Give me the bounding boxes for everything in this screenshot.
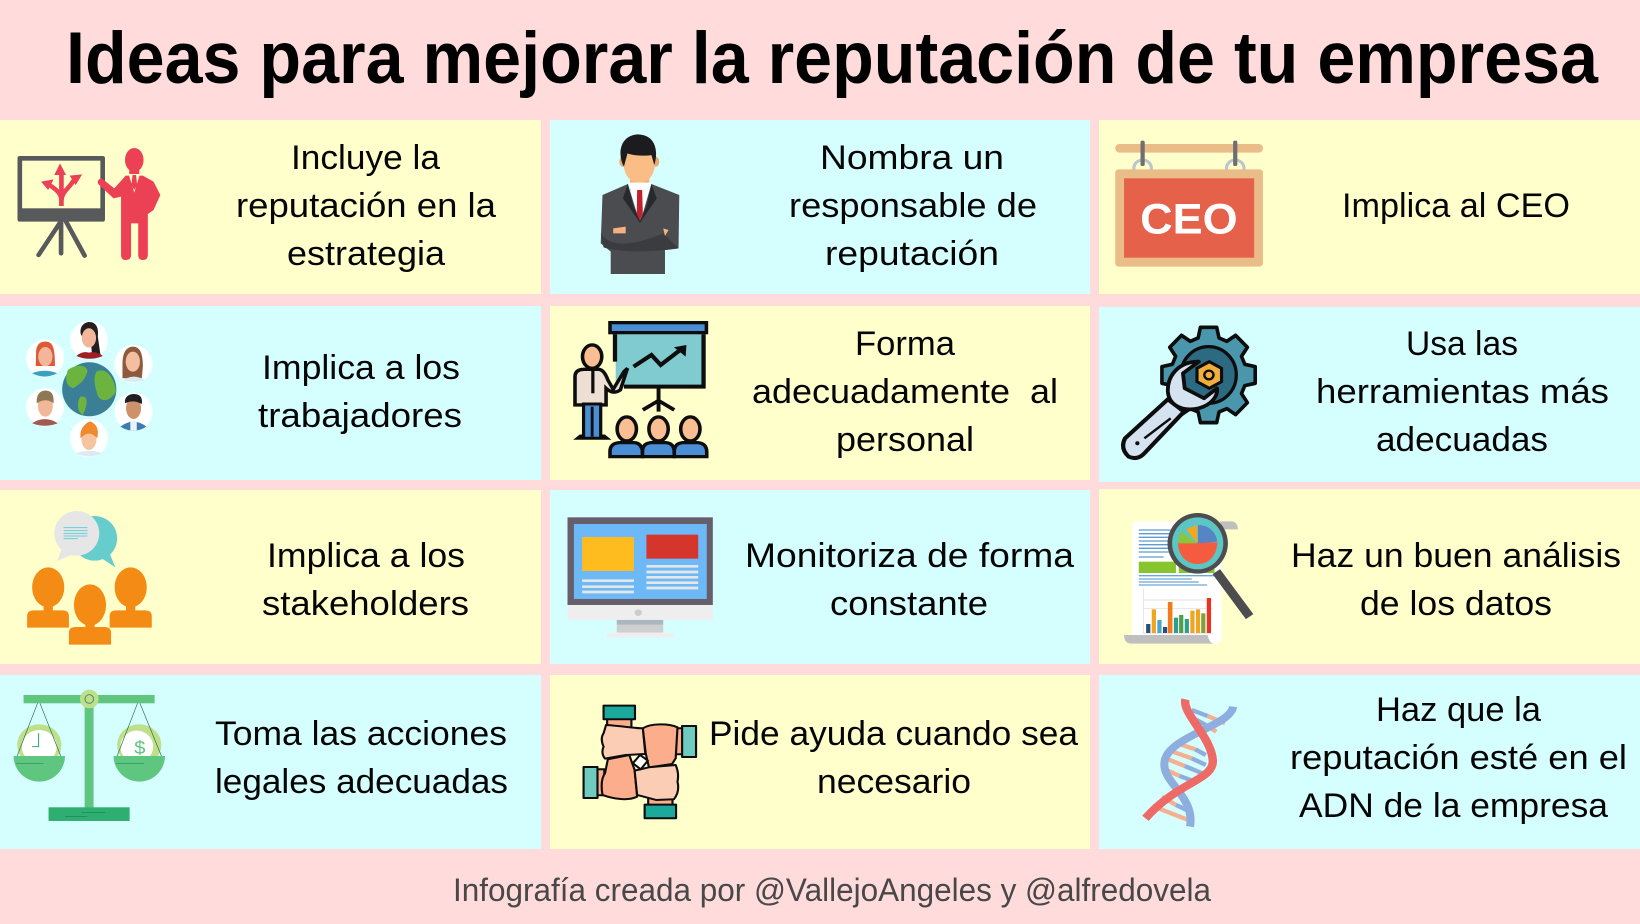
text block: personal [836, 421, 974, 459]
panel: Implica a los trabajadores [0, 306, 541, 480]
text block: herramientas más [1316, 373, 1609, 411]
icon: report under magnifier [1124, 513, 1250, 644]
icon: presenter with strategy board [17, 148, 160, 260]
text block: Pide ayuda cuando sea [709, 715, 1078, 753]
text block: estrategia [287, 235, 445, 273]
panel: Usa las herramientas más adecuadas [1099, 307, 1640, 482]
text block [236, 139, 496, 273]
text block: de los datos [1360, 585, 1552, 623]
text block: necesario [817, 763, 971, 801]
text block: reputación [825, 235, 999, 273]
text block: reputación esté en el [1290, 739, 1627, 777]
text block [789, 139, 1037, 273]
icon: balance scale with clock and money: $ [134, 738, 146, 759]
text block [1290, 691, 1627, 825]
text block: adecuadamente al [752, 373, 1058, 411]
text block [1291, 537, 1621, 623]
icon: four linked hands [584, 706, 696, 818]
text block: Toma las acciones [215, 715, 507, 753]
panel: Toma las acciones legales adecuadas [0, 675, 541, 849]
text block: ADN de la empresa [1299, 787, 1608, 825]
text block [262, 537, 469, 623]
panel: Forma adecuadamente al personal [550, 306, 1090, 480]
footer credit: Infografía creada por @VallejoAngeles y @alfredovela [453, 872, 1211, 908]
text block: reputación en la [236, 187, 496, 225]
icon: businessman with crossed arms [601, 134, 679, 274]
text block: stakeholders [262, 585, 469, 623]
text block: adecuadas [1376, 421, 1548, 459]
text block [215, 715, 508, 801]
text block [709, 715, 1078, 801]
text block [745, 537, 1074, 623]
text block [1316, 325, 1609, 459]
panel: Implica a los stakeholders [0, 490, 541, 664]
icon: desktop monitor dashboard [567, 517, 713, 638]
text block: Usa las [1406, 325, 1518, 363]
icon: balance scale with clock and money [14, 690, 165, 821]
text block: Implica a los [267, 537, 465, 575]
panel: Pide ayuda cuando sea necesario [550, 675, 1090, 849]
icon: trainer with chart and audience [575, 323, 707, 457]
icon: gear and wrench [1123, 327, 1255, 458]
icon: DNA helix [1145, 699, 1233, 827]
text block: legales adecuadas [215, 763, 508, 801]
icon: people around globe [26, 321, 152, 457]
text block: constante [830, 585, 988, 623]
text block [752, 325, 1058, 459]
text block: Haz un buen análisis [1291, 537, 1621, 575]
panel: Nombra un responsable de reputación [550, 120, 1090, 294]
text block: Implica al CEO [1342, 187, 1570, 225]
panel: Haz que la reputación esté en el ADN de la empresa [1099, 675, 1640, 849]
panel: Implica al CEO [1099, 120, 1640, 294]
text block: Haz que la [1376, 691, 1541, 729]
text block: Implica a los [262, 349, 460, 387]
text block: trabajadores [258, 397, 462, 435]
icon: stakeholders with speech bubbles [27, 511, 152, 645]
panel: Haz un buen análisis de los datos [1099, 489, 1640, 664]
icon: CEO hanging sign [1115, 141, 1263, 267]
text block [258, 349, 462, 435]
text block: Forma [855, 325, 955, 363]
panel: Monitoriza de forma constante [550, 490, 1090, 664]
text block: Monitoriza de forma [745, 537, 1074, 575]
icon: CEO hanging sign: CEO [1140, 195, 1238, 243]
text block: Nombra un [820, 139, 1004, 177]
text block: Incluye la [291, 139, 440, 177]
panel: Incluye la reputación en la estrategia [0, 120, 541, 294]
text block: responsable de [789, 187, 1037, 225]
